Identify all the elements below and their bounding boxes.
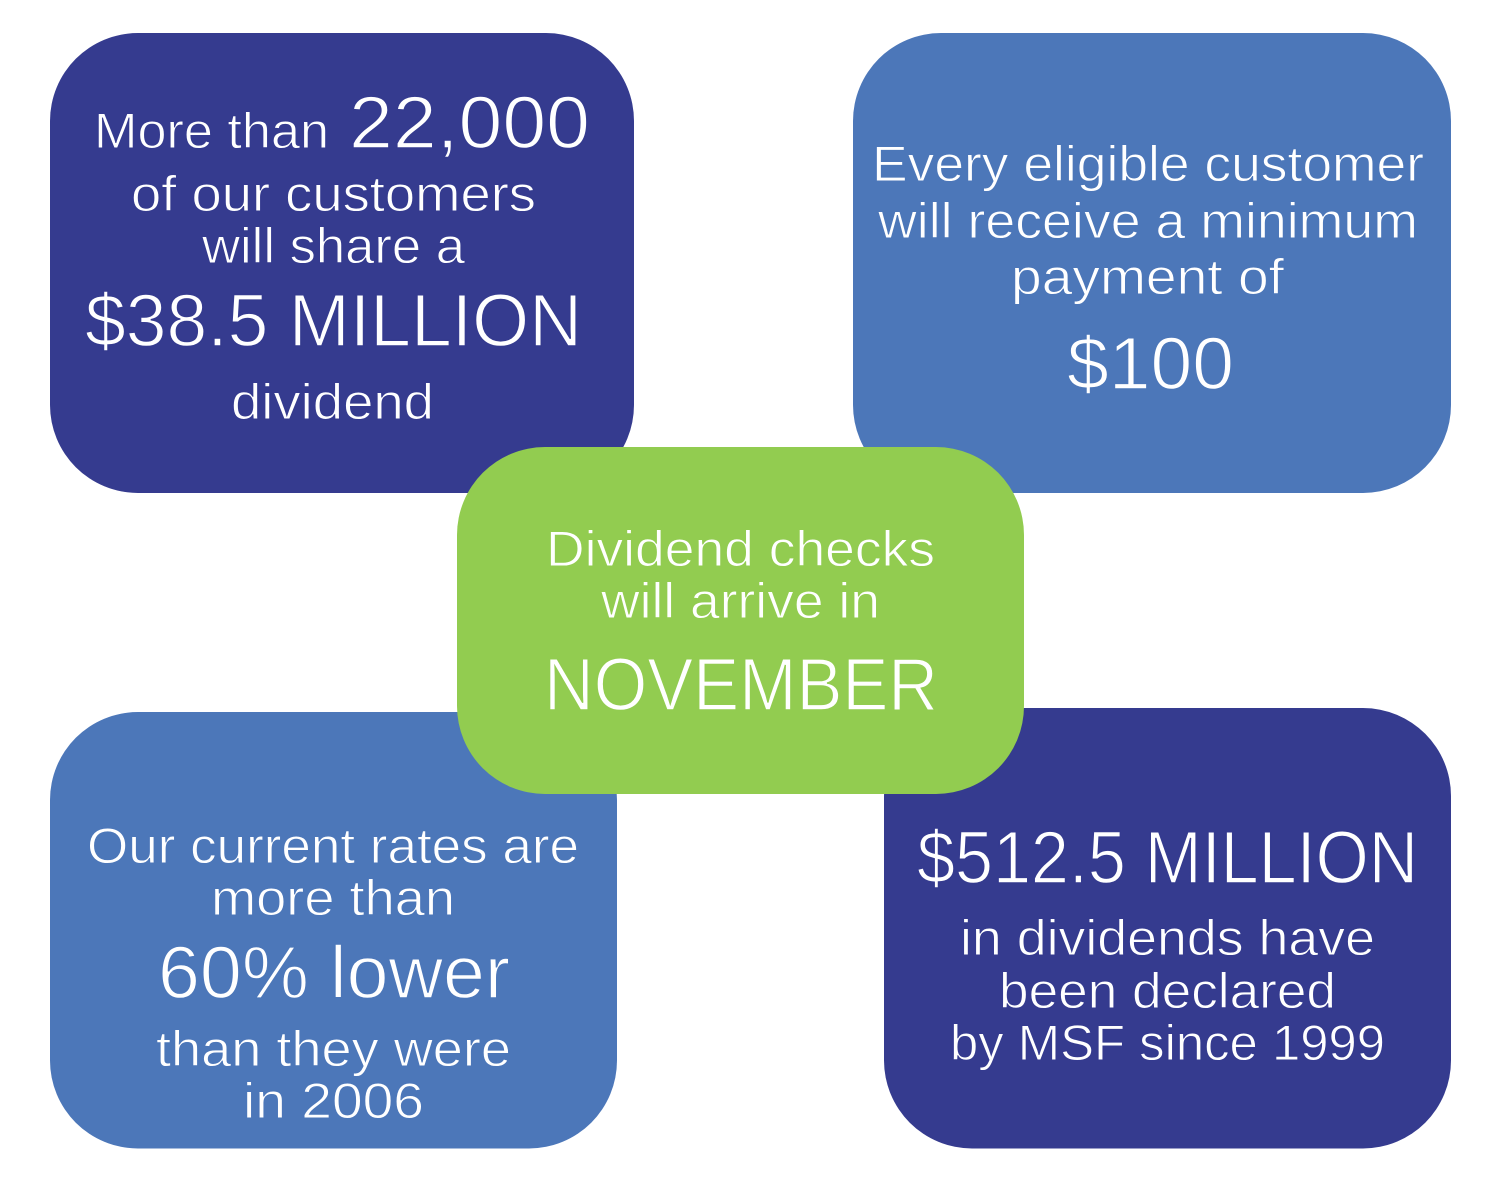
text: NOVEMBER: NOVEMBER [544, 643, 938, 726]
text: $38.5 MILLION: $38.5 MILLION [85, 279, 582, 362]
panel: 22,000 customers share dividend [50, 33, 634, 493]
text: every eligible customer will receive a minimum payment of: Every eligible customer [872, 136, 1424, 192]
panel: dividends since 1999 [884, 708, 1451, 1148]
text: dividend checks will arrive in [546, 521, 935, 629]
text: More than 22,000 [94, 81, 590, 164]
text: in dividends have been declared by MSF since 1999: by MSF since 1999 [950, 1015, 1385, 1071]
text: than they were in 2006: in 2006 [243, 1073, 424, 1129]
text: of our customers will share a [131, 166, 536, 274]
text: our current rates are more than [87, 818, 579, 926]
text: our current rates are more than: Our current rates are [87, 818, 579, 874]
text: in dividends have been declared by MSF since 1999 [950, 910, 1385, 1071]
text: dividend checks will arrive in: Dividend checks [546, 521, 935, 577]
panel: center November [457, 447, 1024, 794]
text: every eligible customer will receive a minimum payment of: will receive a minimum [877, 193, 1418, 249]
text: our current rates are more than: more than [211, 870, 455, 926]
text: More than 22,000: More than [94, 103, 329, 159]
text: every eligible customer will receive a minimum payment of [872, 136, 1424, 305]
text: dividend: dividend [231, 374, 434, 430]
text: in dividends have been declared by MSF since 1999: been declared [999, 963, 1336, 1019]
text: $512.5 MILLION: $512.5 MILLION [917, 816, 1418, 899]
text: every eligible customer will receive a minimum payment of: payment of [1011, 249, 1284, 305]
text: than they were in 2006 [156, 1021, 511, 1129]
text: in dividends have been declared by MSF since 1999: in dividends have [960, 910, 1375, 966]
text: than they were in 2006: than they were [156, 1021, 511, 1077]
text: 60% lower: 60% lower [158, 931, 510, 1014]
panel: rates lower [50, 712, 617, 1148]
text: More than 22,000: 22,000 [349, 81, 590, 164]
panel: minimum payment [853, 33, 1451, 493]
text: dividend checks will arrive in: will arrive in [600, 573, 880, 629]
text: $100: $100 [1067, 322, 1234, 405]
text: of our customers will share a: will share a [201, 218, 465, 274]
text: of our customers will share a: of our customers [131, 166, 536, 222]
